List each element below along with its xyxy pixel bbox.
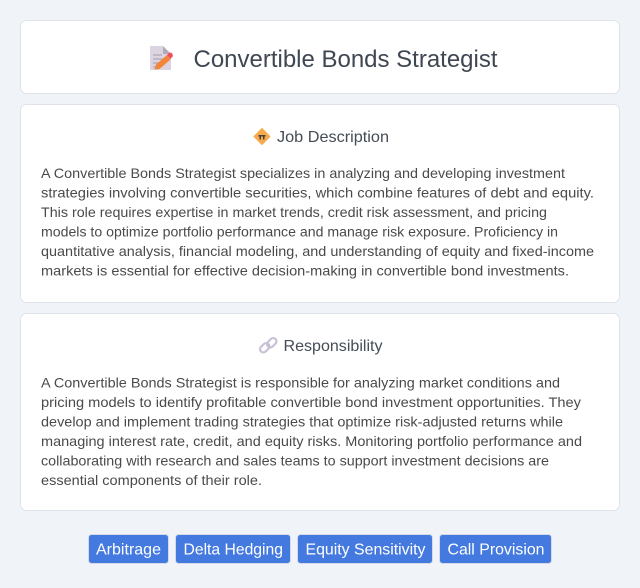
icon: chain link — [259, 337, 278, 354]
responsibility text: develop and implement trading strategies that optimize risk-adjusted returns while — [41, 414, 563, 430]
heading: job description: Job Description — [277, 129, 389, 146]
responsibility text: managing interest rate, credit, and equity risks. Monitoring portfolio performance and — [41, 433, 582, 449]
job description text — [41, 165, 594, 278]
tag: call provision: Call Provision — [448, 542, 544, 558]
job description text: A Convertible Bonds Strategist specializes in analyzing and developing investment — [41, 165, 565, 181]
responsibility text: pricing models to identify profitable convertible bond investment opportunities. They — [41, 394, 581, 410]
tags row — [88, 534, 552, 564]
icon: document with pencil — [150, 46, 173, 70]
responsibility text: essential components of their role. — [41, 472, 262, 488]
tag: delta hedging — [176, 534, 290, 564]
heading: responsibility: Responsibility — [284, 338, 382, 355]
job description text: quantitative analysis, financial modeling, and understanding of equity and fixed-income — [41, 243, 594, 259]
job description text: markets is essential for effective decision-making in convertible bond investments. — [41, 262, 569, 278]
panel: title — [20, 20, 620, 94]
responsibility text — [41, 374, 582, 488]
title text: Convertible Bonds Strategist — [194, 46, 498, 73]
job description text: models to optimize portfolio performance and manage risk exposure. Proficiency in — [41, 224, 558, 240]
job description text: strategies involving convertible securities, which combine features of debt and equity. — [41, 184, 594, 200]
responsibility text: collaborating with research and sales teams to support investment decisions are — [41, 452, 549, 468]
job description text: This role requires expertise in market trends, credit risk assessment, and pricing — [41, 204, 547, 220]
tag: equity sensitivity — [298, 534, 432, 564]
responsibility text: A Convertible Bonds Strategist is responsible for analyzing market conditions and — [41, 374, 560, 390]
panel: job description — [20, 104, 620, 302]
tag: delta hedging: Delta Hedging — [184, 542, 283, 558]
tag: arbitrage — [88, 534, 168, 564]
tag: equity sensitivity: Equity Sensitivity — [306, 542, 426, 558]
icon: construction diamond — [254, 128, 270, 144]
panel: responsibility — [20, 314, 620, 510]
tag: arbitrage: Arbitrage — [96, 542, 161, 558]
tag: call provision — [440, 534, 552, 564]
